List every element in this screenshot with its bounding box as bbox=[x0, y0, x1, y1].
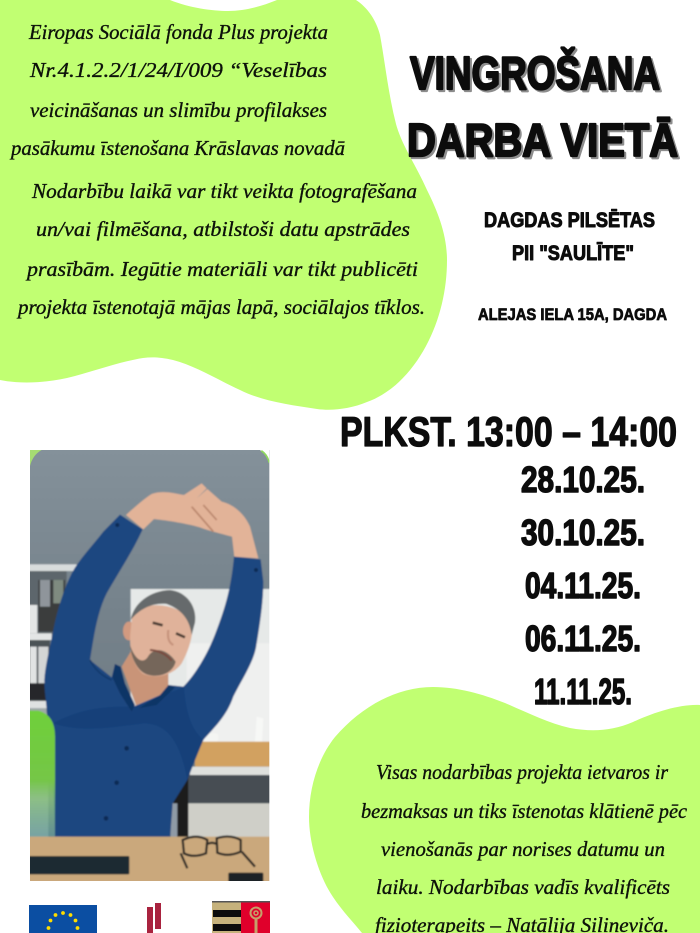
list: session dates: 30.10.25. bbox=[521, 512, 645, 553]
text: participation details: laiku. Nodarbības vadīs kvalificēts bbox=[376, 875, 670, 899]
list: session dates bbox=[521, 459, 645, 712]
text: venue name: DAGDAS PILSĒTAS bbox=[484, 209, 655, 232]
text: project title: Eiropas Sociālā fonda Plus projekta bbox=[28, 20, 328, 44]
text: project title: Nr.4.1.2.2/1/24/I/009 “Veselības bbox=[29, 58, 327, 82]
phone bbox=[228, 873, 263, 883]
green overlay block bbox=[27, 711, 55, 837]
man: head bbox=[123, 590, 195, 676]
glasses bbox=[181, 837, 255, 868]
text: photography notice: Nodarbību laikā var tikt veikta fotografēšana bbox=[31, 179, 417, 203]
text: photography notice: un/vai filmēšana, atbilstoši datu apstrādes bbox=[36, 217, 410, 241]
list: session dates: 11.11.25. bbox=[534, 671, 632, 712]
text: participation details: vienošanās par norises datumu un bbox=[381, 837, 665, 861]
keyboard bbox=[27, 856, 129, 874]
text: participation details: Visas nodarbības projekta ietvaros ir bbox=[376, 760, 669, 784]
text: venue address: ALEJAS IELA 15A, DAGDA bbox=[478, 305, 667, 324]
desk bbox=[30, 835, 270, 881]
man: shirt bbox=[44, 515, 263, 839]
list: session dates: 04.11.25. bbox=[525, 565, 641, 606]
text: venue name: PII "SAULĪTE" bbox=[512, 242, 634, 265]
text: participation details: bezmaksas un tiks īstenotas klātienē pēc bbox=[361, 799, 688, 823]
logo: Latvia red bars bbox=[147, 903, 161, 933]
text: venue name bbox=[484, 209, 655, 265]
text: project title: veicināšanas un slimību profilakses bbox=[30, 98, 327, 122]
logo: EU flag bbox=[29, 905, 97, 933]
logo: Krāslava coat of arms bbox=[212, 901, 270, 933]
photo: man stretching at office desk bbox=[27, 447, 274, 887]
text: photography notice: prasībām. Iegūtie materiāli var tikt publicēti bbox=[25, 257, 418, 281]
list: session dates: 28.10.25. bbox=[521, 459, 645, 500]
man: shirt buttons bbox=[104, 523, 258, 821]
text: photography notice: projekta īstenotajā mājas lapā, sociālajos tīklos. bbox=[16, 295, 425, 319]
blob shape: bottom green bbox=[309, 687, 700, 933]
panel: project information blob bbox=[0, 0, 447, 410]
text: project title: pasākumu īstenošana Krāslavas novadā bbox=[9, 136, 345, 160]
text: participation details bbox=[361, 760, 688, 933]
text: photography notice bbox=[16, 179, 425, 319]
blob shape: top green bbox=[0, 0, 447, 410]
man: neck bbox=[122, 650, 168, 705]
panel: free participation blob bbox=[309, 687, 700, 933]
list: session dates: 06.11.25. bbox=[525, 618, 641, 659]
man: arms and hands bbox=[126, 483, 258, 558]
heading: main title bbox=[407, 47, 680, 168]
text: project title bbox=[9, 20, 345, 160]
